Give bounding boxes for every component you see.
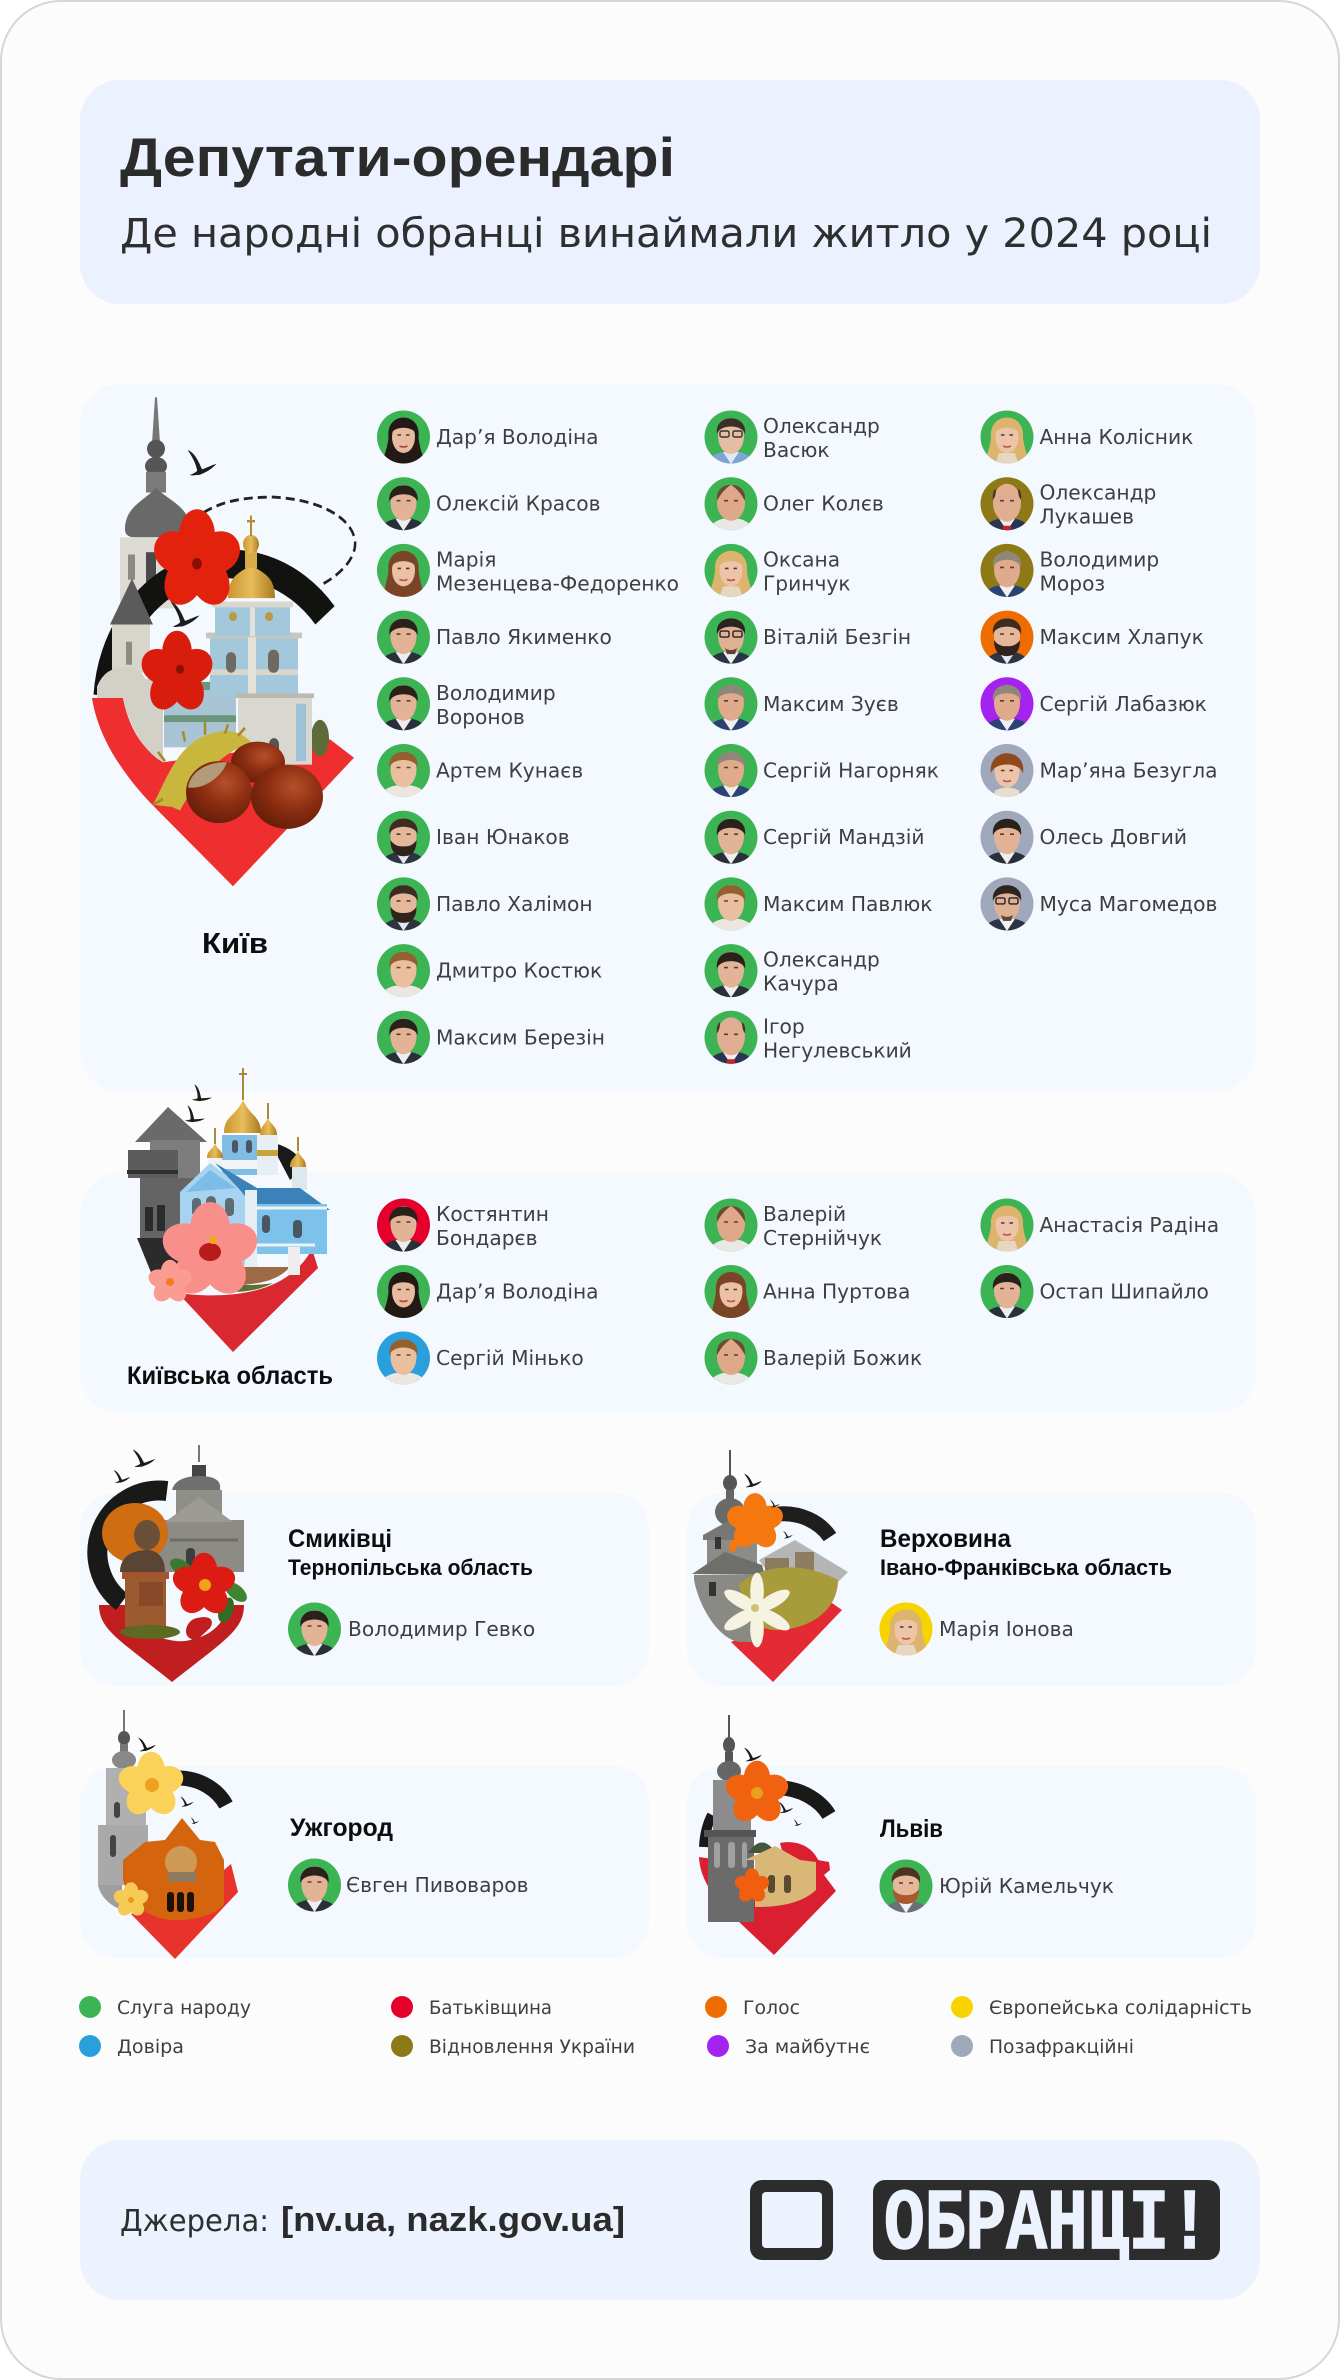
deputy	[377, 744, 583, 798]
deputy	[980, 410, 1193, 465]
title: Депутати-орендарі	[120, 126, 675, 188]
deputy: Олександр	[763, 948, 880, 972]
sources: Джерела:	[120, 2204, 269, 2239]
legend	[79, 1996, 1252, 2058]
deputy: Олександр	[763, 414, 880, 438]
deputy	[377, 877, 593, 932]
deputy: Муса Магомедов	[1040, 892, 1217, 916]
deputy	[980, 1265, 1209, 1320]
sources	[120, 2201, 625, 2239]
heading: Ужгород: Ужгород	[290, 1814, 393, 1842]
deputy: Мороз	[1040, 571, 1105, 595]
deputy: Павло Якименко	[436, 625, 612, 649]
legend item: За майбутнє	[745, 2036, 870, 2058]
deputy: Анастасія Радіна	[1040, 1213, 1219, 1237]
illustration: Львів	[699, 1715, 836, 1955]
deputy: Володимир Гевко	[348, 1617, 535, 1641]
deputy: Сергій Лабазюк	[1040, 692, 1207, 716]
deputy	[980, 1198, 1219, 1253]
deputy: Ігор	[763, 1014, 805, 1038]
deputy: Стернійчук	[763, 1226, 882, 1250]
panel: Верховина	[687, 1450, 1256, 1686]
deputy: Марія	[436, 547, 496, 571]
deputy: Максим Березін	[436, 1025, 605, 1049]
header panel	[80, 80, 1260, 304]
deputy	[377, 1198, 549, 1253]
deputy	[704, 1198, 882, 1253]
deputy	[704, 544, 851, 598]
deputy	[377, 1332, 584, 1386]
deputy: Олександр	[1040, 481, 1156, 505]
deputy	[377, 677, 556, 732]
illustration: Ужгород	[98, 1710, 238, 1959]
legend item	[79, 2035, 184, 2058]
deputy: Воронов	[436, 705, 525, 729]
legend item	[705, 1996, 800, 2019]
deputy: Качура	[763, 972, 839, 996]
panel: Ужгород	[80, 1710, 649, 1959]
deputy	[980, 544, 1159, 598]
deputy	[377, 544, 679, 597]
deputy: Остап Шипайло	[1040, 1280, 1209, 1304]
deputy	[704, 944, 880, 999]
deputy: Мар’яна Безугла	[1040, 758, 1217, 782]
deputy	[704, 410, 880, 465]
panel: Київська область	[80, 1068, 1256, 1413]
deputy: Бондарєв	[436, 1226, 538, 1250]
deputy	[980, 744, 1217, 798]
legend item: Слуга народу	[117, 1997, 251, 2019]
deputy	[377, 811, 570, 865]
deputy	[880, 1860, 1114, 1914]
deputy: Олег Колєв	[763, 492, 884, 516]
panel: sources and logo	[80, 2140, 1260, 2300]
deputy: Олексій Красов	[436, 492, 601, 516]
deputy	[704, 744, 939, 798]
deputy	[980, 677, 1207, 732]
deputy: Дмитро Костюк	[436, 959, 602, 983]
subheading: region: Тернопільська область	[288, 1555, 533, 1580]
deputy: Володимир	[1040, 547, 1159, 571]
deputy	[377, 944, 602, 999]
deputy	[704, 811, 924, 865]
deputy: Олесь Довгий	[1040, 825, 1187, 849]
deputy: Володимир	[436, 681, 556, 705]
deputy: Віталій Безгін	[763, 625, 911, 649]
deputy	[704, 611, 911, 665]
deputy: Валерій Божик	[763, 1346, 922, 1370]
deputy: Максим Павлюк	[763, 892, 932, 916]
deputy: Сергій Мандзій	[763, 825, 924, 849]
deputy: Марія Іонова	[939, 1617, 1074, 1641]
deputy	[980, 811, 1187, 865]
deputy: Сергій Мінько	[436, 1346, 584, 1370]
deputy	[704, 1332, 922, 1386]
deputy: Анна Колісник	[1040, 425, 1193, 449]
panel: Львів	[687, 1715, 1256, 1958]
legend item: Відновлення України	[429, 2036, 635, 2058]
illustration: Київ	[92, 397, 355, 886]
legend item: Європейська солідарність	[989, 1997, 1252, 2019]
deputy	[377, 611, 612, 665]
sources: [nv.ua, nazk.gov.ua]	[281, 2201, 625, 2239]
deputy: Дар’я Володіна	[436, 1280, 599, 1304]
subheading: region: Івано-Франківська область	[880, 1555, 1172, 1580]
deputy	[704, 677, 899, 732]
deputy	[377, 410, 599, 464]
deputy	[704, 1265, 910, 1318]
panel: Смиківці	[80, 1445, 649, 1686]
deputy: Костянтин	[436, 1202, 549, 1226]
heading: Львів: Львів	[880, 1815, 943, 1843]
deputies: Київська область	[377, 1198, 1219, 1386]
deputies: Київ	[377, 410, 1217, 1065]
subtitle: Де народні обранці винаймали житло у 2024 році	[120, 211, 1212, 257]
deputy: Сергій Нагорняк	[763, 758, 939, 782]
deputy	[980, 477, 1156, 532]
deputy: Гринчук	[763, 571, 851, 595]
deputy: Лукашев	[1040, 505, 1134, 529]
deputy	[704, 477, 884, 532]
deputy: Валерій	[763, 1202, 846, 1226]
legend item: Позафракційні	[989, 2036, 1134, 2058]
deputy: Іван Юнаков	[436, 825, 570, 849]
logo: wordmark: ОБРАНЦІ!	[884, 2176, 1210, 2274]
legend item: Голос	[743, 1997, 800, 2019]
deputy: Артем Кунаєв	[436, 758, 583, 782]
deputy	[288, 1602, 535, 1657]
deputy: Павло Халімон	[436, 892, 593, 916]
label: Київ: Київ	[202, 928, 268, 960]
deputy: Мезенцева-Федоренко	[436, 571, 679, 595]
deputy	[288, 1858, 529, 1913]
deputy	[377, 1265, 599, 1318]
deputy	[377, 1011, 605, 1065]
deputy: Максим Зуєв	[763, 692, 899, 716]
deputy: Негулевський	[763, 1038, 912, 1062]
legend item: Батьківщина	[429, 1997, 552, 2019]
deputy	[980, 611, 1204, 665]
deputy	[704, 877, 932, 932]
deputy	[704, 1011, 912, 1065]
deputy: Анна Пуртова	[763, 1280, 910, 1304]
deputy	[980, 877, 1217, 932]
logo: square	[750, 2180, 833, 2260]
illustration: Київська область	[127, 1068, 330, 1352]
deputy	[880, 1602, 1074, 1657]
deputy: Васюк	[763, 438, 830, 462]
label: Київська область: Київська область	[127, 1362, 333, 1390]
deputy	[377, 477, 601, 532]
deputy: Оксана	[763, 547, 840, 571]
illustration: Верховина	[692, 1450, 848, 1682]
legend item: Довіра	[117, 2036, 184, 2058]
deputy: Юрій Камельчук	[939, 1874, 1114, 1898]
deputy: Максим Хлапук	[1040, 625, 1204, 649]
deputy: Євген Пивоваров	[346, 1873, 529, 1897]
heading: Верховина: Верховина	[880, 1525, 1012, 1553]
illustration: Смиківці	[97, 1445, 250, 1682]
deputy: Дар’я Володіна	[436, 425, 599, 449]
heading: Смиківці: Смиківці	[288, 1525, 392, 1553]
panel: Київ	[80, 384, 1256, 1092]
